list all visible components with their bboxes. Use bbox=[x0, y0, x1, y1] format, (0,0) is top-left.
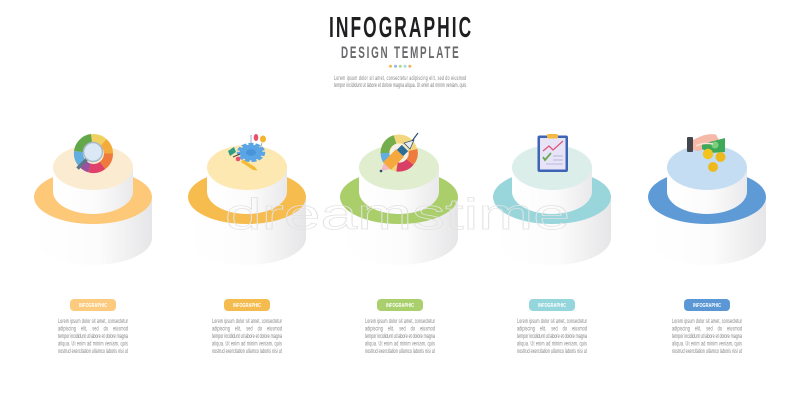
intro text: Lorem ipsum dolor sit amet, consectetur adipiscing elit, sed do eiusmod bbox=[334, 75, 466, 82]
panel: step 1 cylinder bbox=[34, 145, 152, 265]
watermark: dreamstime bbox=[225, 190, 570, 239]
subtitle: DESIGN TEMPLATE bbox=[341, 42, 459, 62]
step 5 text: adipiscing elit, sed do eiusmod bbox=[672, 326, 742, 333]
step 1 label bbox=[70, 299, 116, 311]
step 4 text: nostrud exercitation ullamco laboris nisi ut bbox=[517, 348, 587, 355]
decorative colored dots bbox=[389, 65, 411, 68]
step 3 text: Lorem ipsum dolor sit amet, consectetur bbox=[365, 318, 435, 325]
step 3 text: tempor incididunt ut labore et dolore magna bbox=[365, 333, 435, 340]
step 1 label: INFOGRAPHIC bbox=[79, 303, 107, 309]
icon: hand with cash and coins bbox=[687, 134, 726, 172]
step 2 label: INFOGRAPHIC bbox=[233, 303, 261, 309]
step 2 text: nostrud exercitation ullamco laboris nisi ut bbox=[212, 348, 282, 355]
step 5 text: tempor incididunt ut labore et dolore magna bbox=[672, 333, 742, 340]
step 2 text: aliqua. Ut enim ad minim veniam, quis bbox=[212, 341, 282, 348]
intro text bbox=[334, 75, 467, 89]
panel: step 3 cylinder bbox=[340, 145, 458, 265]
step 2 text: Lorem ipsum dolor sit amet, consectetur bbox=[212, 318, 282, 325]
panel: step 4 cylinder bbox=[493, 145, 611, 265]
step 1 text: adipiscing elit, sed do eiusmod bbox=[58, 326, 128, 333]
step 1 text: nostrud exercitation ullamco laboris nisi ut bbox=[58, 348, 128, 355]
step 1 text: tempor incididunt ut labore et dolore magna bbox=[58, 333, 128, 340]
step 1 text: Lorem ipsum dolor sit amet, consectetur bbox=[58, 318, 128, 325]
step 1 text bbox=[58, 318, 128, 355]
step 4 label bbox=[529, 299, 575, 311]
step 3 text: aliqua. Ut enim ad minim veniam, quis bbox=[365, 341, 435, 348]
step 4 text: aliqua. Ut enim ad minim veniam, quis bbox=[517, 341, 587, 348]
panel: step 5 cylinder bbox=[648, 145, 766, 265]
step 2 text: tempor incididunt ut labore et dolore magna bbox=[212, 333, 282, 340]
step 2 label bbox=[224, 299, 270, 311]
step 2 text: adipiscing elit, sed do eiusmod bbox=[212, 326, 282, 333]
step 3 label bbox=[377, 299, 423, 311]
step 5 text bbox=[672, 318, 742, 355]
icon: color wheel with magnifier bbox=[78, 138, 108, 169]
panel: step 2 cylinder bbox=[188, 145, 306, 265]
step 5 text: nostrud exercitation ullamco laboris nisi ut bbox=[672, 348, 742, 355]
icon: color wheel with pen bbox=[380, 133, 418, 172]
step 4 text: Lorem ipsum dolor sit amet, consectetur bbox=[517, 318, 587, 325]
step 4 text: adipiscing elit, sed do eiusmod bbox=[517, 326, 587, 333]
step 3 label: INFOGRAPHIC bbox=[386, 303, 414, 309]
step 4 text bbox=[517, 318, 587, 355]
step 5 label bbox=[684, 299, 730, 311]
step 5 text: Lorem ipsum dolor sit amet, consectetur bbox=[672, 318, 742, 325]
step 3 text: nostrud exercitation ullamco laboris nisi ut bbox=[365, 348, 435, 355]
step 5 text: aliqua. Ut enim ad minim veniam, quis bbox=[672, 341, 742, 348]
step 3 text: adipiscing elit, sed do eiusmod bbox=[365, 326, 435, 333]
icon: gear with pencil and flags bbox=[228, 134, 266, 170]
title: INFOGRAPHIC bbox=[329, 12, 471, 44]
step 3 text bbox=[365, 318, 435, 355]
step 1 text: aliqua. Ut enim ad minim veniam, quis bbox=[58, 341, 128, 348]
intro text: tempor incididunt ut labore et dolore magna aliqua. Ut enim ad minim veniam, quis bbox=[334, 82, 467, 89]
step 4 text: tempor incididunt ut labore et dolore magna bbox=[517, 333, 587, 340]
step 4 label: INFOGRAPHIC bbox=[538, 303, 566, 309]
icon: clipboard with chart bbox=[538, 134, 568, 172]
step 2 text bbox=[212, 318, 282, 355]
step 5 label: INFOGRAPHIC bbox=[693, 303, 721, 309]
